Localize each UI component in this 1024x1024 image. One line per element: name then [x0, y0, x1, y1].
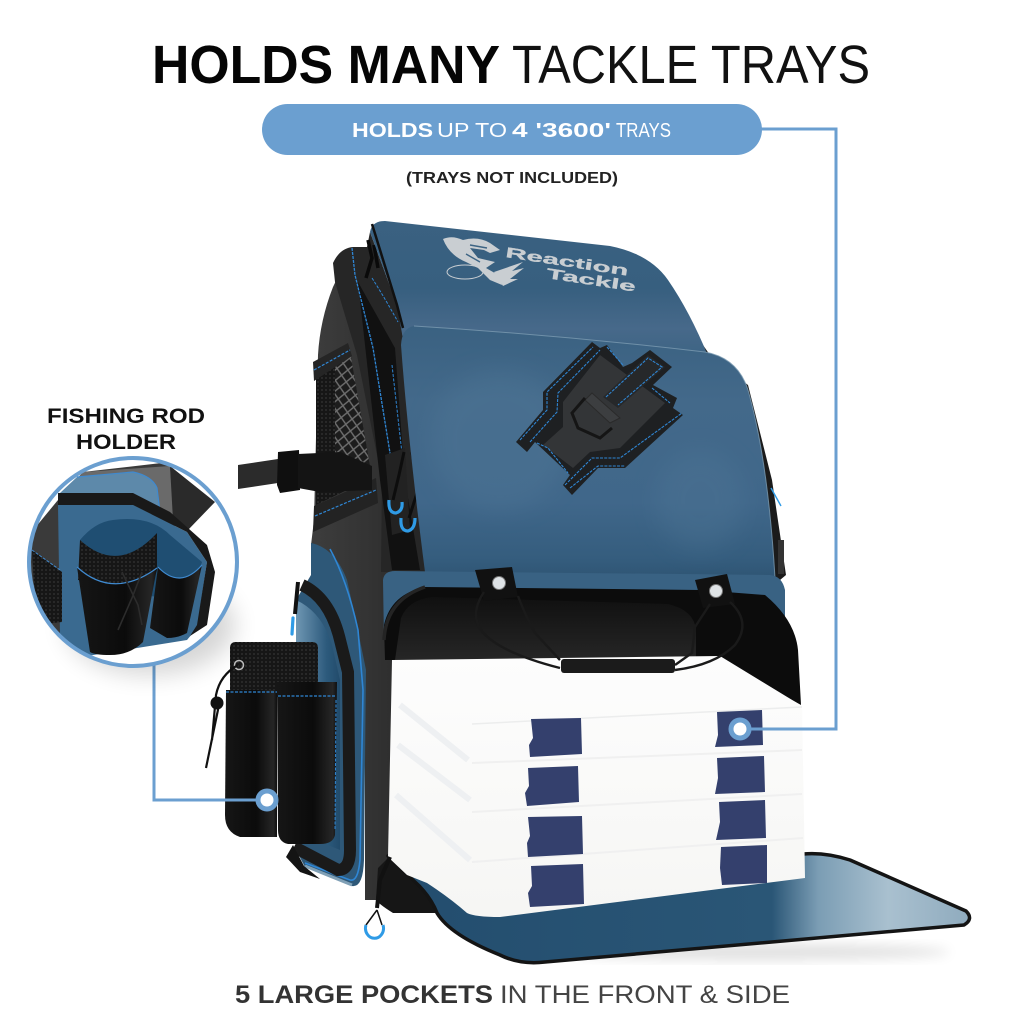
open compartment interior: [384, 587, 801, 705]
right side dark edge: [696, 335, 786, 590]
backpack illustration: [206, 221, 970, 963]
fishing rod mount plate: [516, 342, 683, 495]
note: trays not included: (TRAYS NOT INCLUDED): [406, 170, 618, 187]
handle tabs and cord: [475, 567, 742, 673]
lower side pocket: [294, 543, 366, 886]
mesh pocket: [316, 352, 372, 505]
bottom zipper pull: [366, 857, 390, 938]
callout pill: holds up to 4 3600 trays: 4 '3600': [512, 120, 611, 142]
marker dot: [258, 791, 276, 809]
brand logo: Tackle: [545, 266, 637, 296]
title: TACKLE TRAYS: [512, 35, 870, 95]
front pad: [401, 326, 775, 578]
open front flap: [388, 854, 970, 963]
callout pill: holds up to 4 3600 trays: UP TO: [437, 120, 507, 142]
tackle trays stack: [388, 656, 805, 917]
side strap and buckle: [238, 450, 372, 493]
inset circle: rod holder detail: [25, 458, 237, 675]
black zip column: [333, 232, 426, 572]
marker dot: [731, 720, 749, 738]
rod holder cups on side: [206, 642, 337, 844]
heading: fishing rod holder: FISHING ROD: [47, 405, 205, 428]
heading: fishing rod holder: HOLDER: [76, 431, 176, 454]
callout pill: holds up to 4 3600 trays: HOLDS: [352, 120, 433, 142]
leader line: rod holder callout: [154, 664, 276, 809]
callout pill: holds up to 4 3600 trays: TRAYS: [616, 120, 671, 142]
zipper pulls: [385, 448, 418, 535]
title: HOLDS MANY: [152, 35, 500, 95]
blue trim over opening: [383, 571, 785, 640]
ground shadow: [570, 944, 950, 960]
brand logo: [443, 237, 637, 296]
footer caption: 5 LARGE POCKETS: [235, 981, 493, 1009]
heading: fishing rod holder: [47, 405, 205, 454]
footer caption: IN THE FRONT & SIDE: [500, 981, 790, 1009]
tray latches: [525, 710, 767, 907]
leader line: tray callout: [731, 129, 836, 738]
brand logo: Reaction: [504, 245, 629, 280]
feet: [376, 856, 437, 913]
footer caption: [235, 981, 790, 1009]
pocket lower strap: [286, 845, 320, 879]
title: [152, 35, 870, 95]
callout pill: holds up to 4 3600 trays: [262, 104, 762, 155]
side shell: [311, 262, 430, 900]
side zipper pull: [292, 582, 298, 634]
top flap with logo: [370, 221, 708, 356]
